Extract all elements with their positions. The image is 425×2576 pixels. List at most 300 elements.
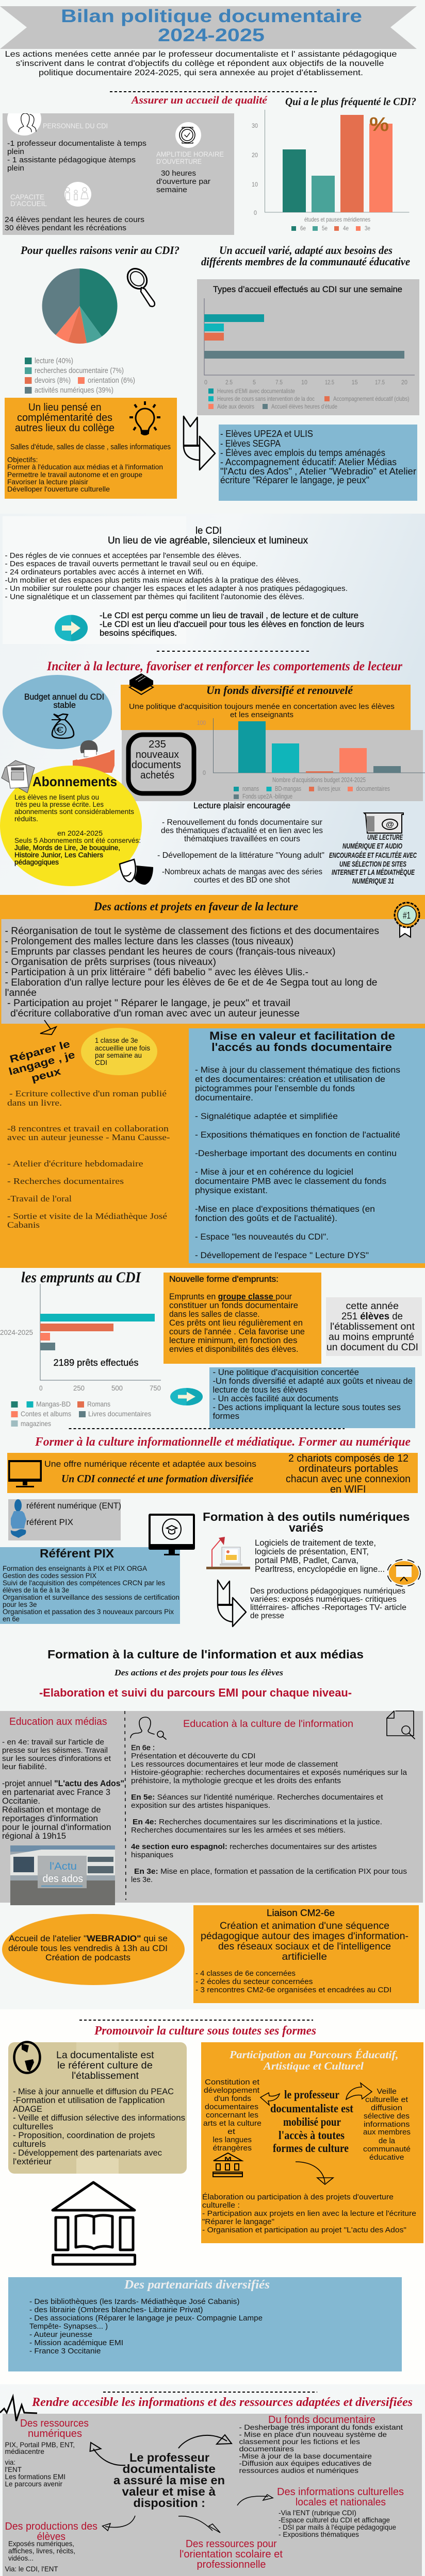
pie chart: raisons — [25, 268, 135, 395]
panel: un lieu pensé: Permettre le travail autonome et en groupe — [7, 470, 142, 479]
arrow: vers projets — [296, 2162, 333, 2184]
icon: loupe — [123, 265, 155, 307]
heading: Réparer le langage — [8, 1039, 76, 1084]
bar chart: fréquentation: 5e — [322, 225, 328, 232]
column: culture de l'information: les 3e. — [131, 1875, 153, 1884]
panel: liaison CM2-6e: Liaison CM2-6e — [267, 1908, 335, 1918]
panel: abonnements: abonnements sont considérablements — [14, 807, 134, 816]
pie chart: raisons: devoirs (8%) — [35, 376, 71, 385]
block: ressources numériques: Des ressources — [20, 2418, 89, 2429]
heading: culture de l'information: Formation à la culture de l'information et aux médias — [47, 1648, 364, 1661]
panel: PEAC: mobilisé pour — [283, 2115, 341, 2128]
panel: un lieu pensé: Favoriser la lecture plaisir — [7, 478, 88, 486]
column: éducation aux médias: Education aux médias — [9, 1716, 107, 1727]
panel: acquisitions chart: romans — [242, 785, 259, 792]
text: logiciels: Pearltress, encyclopédie en ligne... — [255, 1565, 385, 1574]
block: ressources numériques: Les formations EMI — [5, 2472, 66, 2481]
panel: abonnements — [0, 760, 142, 886]
panel: 251 élèves: un document du CDI — [326, 1342, 418, 1353]
panel: le CDI lieu de vie: besoins spécifiques. — [100, 628, 177, 638]
panel: mise en valeur du fonds: et des documentaires: création et utilisation de — [195, 1074, 385, 1084]
box: 235 documents achetés: achetés — [140, 770, 174, 781]
panel: nouvelle forme d'emprunts — [164, 1273, 321, 1364]
panel: liaison CM2-6e: pédagogique autour des images d'information- — [201, 1930, 408, 1942]
block: informations culturelles: -Espace culturel du CDI et affichage — [279, 2516, 390, 2524]
panel: abonnements: Julie, Mords de Lire, Je bouquine, — [14, 843, 120, 852]
panel: PEAC: aux membres — [363, 2128, 411, 2137]
text: lecture plaisir: des thématiques d'actualité et en lien avec les — [161, 826, 323, 835]
text: logiciels: Logiciels de traitement de texte, — [255, 1538, 376, 1548]
panel: liste d'actions: - Prolongement des malles lecture dans les classes (tous niveaux) — [5, 936, 293, 947]
panel: acquisitions chart: Nombre d'acquisitions budget 2024-2025 — [272, 776, 366, 784]
panel: référent culture: culturelles — [13, 2122, 53, 2131]
panel: abonnements: réduits. — [14, 815, 38, 823]
pie chart: raisons: lecture (40%) — [35, 357, 73, 365]
panel: acquisitions chart — [122, 718, 425, 801]
panel: personnel, horaires, capacité: CAPACITE — [10, 193, 44, 201]
panel: référents: référent PIX — [26, 1517, 73, 1527]
panel: référent culture — [8, 2042, 187, 2174]
panel: nouvelle forme d'emprunts: lecture minimum, en fonction des — [169, 1336, 297, 1345]
panel: PEAC: - Organisation et participation au projet "L'actu des Ados" — [202, 2226, 406, 2234]
panel: types d'accueil chart: Types d’accueil effectués au CDI sur une semaine — [213, 284, 402, 294]
panel: un lieu pensé: Salles d'étude, salles de classe , salles informatiques — [10, 443, 171, 451]
block: ressources numériques — [5, 2418, 89, 2488]
block: ressources numériques: l'ENT — [5, 2465, 22, 2473]
block: ressources numériques: via: — [5, 2458, 15, 2466]
panel: référent PIX — [0, 1547, 180, 1624]
column: éducation aux médias: régional à 19h15 — [2, 1832, 66, 1841]
column: éducation aux médias: en partenariat avec France 3 — [2, 1788, 110, 1797]
panel: référent culture: le référent culture de — [57, 2060, 153, 2071]
icon: écran formation — [149, 1514, 195, 1555]
panel: référent PIX: en 6e — [3, 1615, 20, 1623]
intro text: Les actions menées cette année par le professeur documentaliste et l' assistante pédagogique — [5, 50, 397, 59]
block: informations culturelles: - DSI par mails à l'équipe pédagogique — [279, 2523, 396, 2531]
panel: PEAC: informations — [364, 2120, 410, 2129]
block: ressources numériques: numériques — [28, 2428, 82, 2439]
icon: livre numérique — [364, 813, 403, 833]
panel: nouvelle forme d'emprunts: Nouvelle forme d'emprunts: — [169, 1274, 279, 1284]
icon: flèche ronde 2 — [170, 1388, 203, 1405]
column: éducation aux médias: -projet annuel "L'actu des Ados" — [2, 1779, 124, 1788]
text: professeur documentaliste: Le professeur — [129, 2451, 209, 2464]
bar chart: emprunts: magazines — [21, 1419, 51, 1428]
text: capacité: 30 élèves pendant les récréations — [5, 224, 126, 232]
block: informations culturelles — [277, 2486, 404, 2538]
panel: PEAC: Artistique et Culturel — [263, 2060, 364, 2072]
panel: acquisitions chart: BD-mangas — [275, 785, 301, 792]
text: logiciels — [255, 1538, 385, 1574]
text: lecture plaisir: - Renouvellement du fonds documentaire sur — [162, 818, 323, 827]
block: productions des élèves: affiches, livres, récits, — [8, 2547, 75, 2555]
icon: livres — [129, 673, 153, 694]
panel: liaison CM2-6e: - 3 rencontres CM2-6e organisées et encadrées au CDI — [195, 1986, 391, 1994]
panel: types d'accueil chart: 10 — [301, 379, 307, 386]
box: 235 documents achetés: documents — [132, 759, 181, 771]
panel: offre numérique: Une offre numérique récente et adaptée aux besoins — [44, 1459, 256, 1469]
text: professeur documentaliste: a assuré la mise en — [113, 2473, 225, 2487]
bar chart: fréquentation: 0 — [254, 209, 257, 216]
panel: synthèse lecture: formes — [213, 1412, 239, 1421]
panel: acquisitions chart: 0 — [203, 769, 206, 776]
panel: référent culture: - Mise à jour annuelle et diffusion du PEAC — [13, 2087, 174, 2096]
panel: mise en valeur du fonds: - Espace "les nouveautés du CDI". — [195, 1232, 329, 1242]
heading: Réparer le langage: Réparer le — [9, 1039, 71, 1065]
bar chart: emprunts: Mangas-BD — [36, 1400, 71, 1408]
panel: référent culture: -Formation et utilisation de l'application — [13, 2096, 165, 2105]
panel: 251 élèves: l'établissement ont — [330, 1321, 415, 1332]
panel: types d'accueil chart: 20 — [401, 379, 407, 386]
block: informations culturelles: -Via l'ENT (rubrique CDI) — [279, 2509, 356, 2517]
bar chart: emprunts: Livres documentaires — [88, 1410, 151, 1418]
text: logiciels: logiciels de présentation, ENT, — [255, 1547, 369, 1556]
text: productions pédagogiques: variées: exposés numériques- critiques — [250, 1595, 397, 1604]
panel: acquisitions chart: documentaires — [356, 785, 390, 792]
block: productions des élèves: Des productions des — [5, 2521, 97, 2532]
panel: abonnements: en 2024-2025 — [57, 829, 103, 837]
callout: 1 classe de 3e: par semaine au — [95, 1051, 142, 1059]
text: heures d'ouverture: d'ouverture par — [156, 177, 210, 186]
bar chart: fréquentation: % — [369, 114, 389, 135]
text: productions pédagogiques: de presse — [250, 1612, 284, 1620]
text: professeur documentaliste — [113, 2451, 225, 2510]
panel: PEAC: Constitution et — [205, 2078, 260, 2087]
intro text: s'inscrivent dans le contrat d'objectifs du collège et répondent aux objectifs de la nouvelle — [15, 59, 384, 68]
arrow: vers ressources numériques — [90, 2443, 125, 2465]
text: heures d'ouverture: 30 heures — [161, 169, 196, 178]
panel: liste d'actions: - Participation au projet " Réparer le langage, je peux" et travail — [7, 998, 290, 1009]
panel: budget: stable — [54, 700, 76, 710]
panel: offre numérique: 2 chariots composés de 12 — [288, 1453, 408, 1464]
panel: types d'accueil chart: Accompagnement éducatif (clubs) — [333, 395, 410, 402]
panel: partenariats: - Auteur jeunesse — [29, 2330, 92, 2339]
heading: outils numériques: variés — [289, 1521, 323, 1534]
panel: nouvelle forme d'emprunts: dans les salles de classe. — [169, 1310, 260, 1319]
panel: types d'accueil chart: 15 — [352, 379, 358, 386]
panel: le CDI lieu de vie: -Un mobilier et des espaces plus petits mais mieux adaptés à la pratique des élèves. — [5, 576, 301, 585]
panel: mise en valeur du fonds: - Mise à jour et en cohérence du logiciel — [195, 1167, 353, 1177]
panel: PEAC: culturelle : — [202, 2201, 240, 2210]
heading: Réparer le langage: langage , je — [8, 1049, 76, 1078]
panel: PEAC: le professeur — [284, 2088, 339, 2101]
panel: abonnements: Les élèves ne lisent plus ou — [14, 793, 99, 801]
text: personnel: plein — [7, 147, 24, 156]
panel: un lieu pensé: Former à l'éducation aux médias et à l'information — [7, 463, 163, 471]
arrow: vers fonds documentaire — [178, 2435, 232, 2448]
panel: partenariats: - des librairie (Ombres blanches- Librairie Privat) — [29, 2306, 203, 2314]
panel: offre numérique: Un CDI connecté et une formation diversifiée — [61, 1472, 253, 1485]
icon: bibliothèque — [53, 2182, 135, 2264]
panel: offre numérique: ordinateurs portables — [299, 1463, 398, 1475]
panel: liste d'actions: d'écriture collaborative d'un roman avec avec un auteur jeunesse — [10, 1008, 300, 1019]
arrow: vers productions — [102, 2516, 135, 2531]
column: culture de l'information: préhistoire, la mythologie grecque et les droits des enfants — [131, 1776, 341, 1785]
panel: le CDI lieu de vie: le CDI — [195, 526, 222, 536]
panel: un lieu pensé: autres lieux du collège — [15, 422, 115, 434]
panel: le CDI lieu de vie: - Une signalétique et un classement par thèmes qui facilitent l'autonomie des élèves. — [5, 592, 304, 601]
section background: ressources — [0, 2384, 425, 2576]
panel: mise en valeur du fonds: - Signalétique adaptée et simplifiée — [195, 1111, 338, 1121]
callout: webradio: Accueil de l'atelier "WEBRADIO" qui se — [9, 1934, 168, 1943]
panel: nouvelle forme d'emprunts: constituer un fonds documentaire — [169, 1301, 298, 1310]
bar chart: emprunts: 0 — [39, 1384, 43, 1392]
block: informations culturelles: Des informations culturelles — [277, 2486, 404, 2498]
text: professeur documentaliste: disposition : — [133, 2496, 205, 2510]
arrow: vers informations culturelles — [237, 2495, 273, 2505]
panel: le CDI lieu de vie — [3, 516, 364, 644]
panel: un lieu pensé — [5, 398, 177, 499]
panel: liaison CM2-6e: des réseaux sociaux et de l'intelligence — [218, 1941, 391, 1952]
panel: PEAC: arts et la culture — [203, 2119, 261, 2128]
text: capacité — [5, 215, 144, 232]
panel: référent PIX: élèves de la 6e à la 3e — [3, 1586, 69, 1594]
column: culture de l'information: Présentation et découverte du CDI — [131, 1752, 256, 1760]
text: personnel: plein — [7, 164, 24, 173]
block: fonds documentaire: classement pour les fictions et les — [239, 2437, 360, 2446]
panel: liaison CM2-6e — [193, 1905, 419, 2003]
panel: mise en valeur du fonds: physique existant. — [195, 1185, 268, 1195]
callout: 1 classe de 3e: 1 classe de 3e — [95, 1036, 138, 1044]
text: lecture plaisir — [157, 801, 324, 885]
block: productions des élèves: vidéos... — [8, 2554, 34, 2562]
block: fonds documentaire: - Mise en place d'un nouveau système de — [239, 2430, 387, 2438]
bar chart: fréquentation: 30 — [252, 122, 258, 129]
panel: budget — [3, 675, 112, 749]
heading: raisons: Pour quelles raisons venir au CDI? — [20, 244, 179, 257]
panel: PEAC: formes de culture — [273, 2142, 349, 2155]
block: ressources numériques: Le parcours avenir — [5, 2480, 62, 2488]
bar chart: emprunts: 2189 prêts effectués — [54, 1358, 138, 1368]
panel: le CDI lieu de vie: - 24 ordinateurs portables avec accés à internet en Wifi. — [5, 568, 204, 577]
panel: liste d'actions: l'année — [5, 988, 37, 998]
text: logiciels: portail PMB, Padlet, Canva, — [255, 1556, 358, 1565]
block: productions des élèves — [5, 2521, 97, 2573]
heading: accueil: Assurer un accueil de qualité — [130, 94, 268, 106]
block: fonds documentaire: Du fonds documentaire — [268, 2414, 375, 2426]
bar chart: emprunts: Contes et albums — [21, 1410, 71, 1418]
panel: types d'accueil chart: 2.5 — [225, 379, 233, 386]
column: éducation aux médias: pour le journal d'information — [2, 1823, 111, 1832]
panel: personnel, horaires, capacité: D'OUVERTURE — [156, 157, 202, 165]
panel: PEAC: Participation au Parcours Éducatif, — [229, 2048, 398, 2061]
panel: mise en valeur du fonds: -Desherbage important des documents en continu — [195, 1148, 397, 1158]
bar chart: fréquentation: 3e — [365, 225, 370, 232]
bar chart: fréquentation: 4e — [343, 225, 349, 232]
panel: mise en valeur du fonds: fonction des goûts et de l'actualité). — [195, 1213, 337, 1223]
bar chart: emprunts: Romans — [87, 1400, 110, 1408]
panel: mise en valeur du fonds — [189, 1028, 425, 1263]
block: ressources numériques: PIX, Portail PMB, ENT, — [5, 2441, 75, 2449]
text: personnel: -1 professeur documentaliste à temps — [7, 139, 146, 148]
heading: outils numériques: Formation à des outils numériques — [203, 1510, 410, 1523]
photo: l'Actu des ados: des ados — [42, 1873, 83, 1885]
bar chart: fréquentation: études et pauses méridiennes — [304, 216, 370, 223]
panel: publics accueillis: - Élèves avec emplois du temps aménagés — [220, 448, 385, 458]
panel: 251 élèves — [326, 1297, 422, 1356]
panel: abonnements: très peu la presse écrite. Les — [15, 800, 104, 808]
column: culture de l'information: En 3e: Mise en place, formation et passation de la certification PIX pour tous — [134, 1867, 407, 1876]
panel: 251 élèves: au moins emprunté — [329, 1331, 414, 1343]
panel: un lieu pensé: Un lieu pensé en — [28, 402, 101, 413]
panel: offre numérique: en WIFI — [330, 1484, 366, 1495]
bar chart: emprunts: 250 — [73, 1384, 85, 1392]
panel: nouvelle forme d'emprunts: envies et disponibilités des élèves. — [169, 1345, 298, 1354]
icon: bureau lampe — [206, 1537, 250, 1569]
panel: liste d'actions — [1, 919, 425, 1024]
photo: l'Actu des ados: l'Actu — [50, 1861, 77, 1872]
panel: mise en valeur du fonds: documentaire. — [195, 1093, 253, 1103]
bar chart: fréquentation: 6e — [300, 225, 306, 232]
panel: liste d'actions: - Réorganisation de tout le système de classement des fictions et des documentaires — [5, 926, 379, 937]
icon: capacité d'accueil — [64, 182, 91, 207]
panel: abonnements: pédagogiques — [14, 858, 59, 866]
arrow: vers veille — [346, 2083, 372, 2099]
panel: ressources — [3, 2414, 422, 2576]
panel: liaison CM2-6e: artificielle — [282, 1951, 327, 1962]
panel: abonnements: Seuls 5 Abonnements ont été conservés: — [14, 836, 141, 844]
panel: PEAC: les langues — [213, 2136, 252, 2144]
text: personnel — [7, 139, 146, 173]
column: culture de l'information — [130, 1711, 415, 1884]
callout: 1 classe de 3e: accueillie une fois — [95, 1044, 150, 1052]
panel: publics accueillis: "l'Actu des Ados" , Atelier "Webradio" et Atelier — [220, 466, 416, 477]
panel: référent PIX: pour les 3e — [3, 1600, 37, 1608]
block: fonds documentaire: -Mise à jour de la base documentaire — [239, 2452, 372, 2460]
panel: référent PIX: Suivi de l'acquisition des compétences CRCN par les — [3, 1579, 165, 1587]
panel: PEAC: Élaboration ou participation à des projets d'ouverture — [202, 2193, 394, 2201]
panel: le CDI lieu de vie: - Des régles de vie connues et acceptées par l'ensemble des élèves. — [5, 551, 241, 560]
column: culture de l'information: En 5e: Séances sur l'identité numérique. Recherches documentaires et — [131, 1793, 383, 1802]
panel: fonds diversifié en-tête — [121, 684, 411, 730]
icon: personne — [11, 1499, 26, 1538]
panel: référent PIX: Organisation et surveillance des sessions de certification — [3, 1593, 179, 1601]
block: productions des élèves: Exposés numériques, — [8, 2539, 74, 2548]
column: éducation aux médias: leur fiabilité. — [2, 1762, 47, 1771]
column: éducation aux médias — [2, 1716, 124, 1841]
panel: nouvelle forme d'emprunts: Ces prêts ont lieu régulièrement en — [169, 1318, 303, 1328]
icon: profil loupe — [130, 1717, 166, 1739]
panel: 251 élèves: cette année — [346, 1300, 399, 1312]
text: professeur documentaliste: documentaliste — [123, 2462, 216, 2476]
arrow: ribbon 2 — [218, 1580, 246, 1626]
block: productions des élèves: Via: le CDI, l'ENT — [5, 2565, 58, 2573]
text: productions pédagogiques: Des productions pédagogiques numériques — [250, 1587, 405, 1596]
panel: offre numérique — [7, 1453, 418, 1495]
icon: globe — [14, 2042, 40, 2073]
block: productions des élèves: élèves — [37, 2531, 66, 2543]
panel: publics accueillis: - Elèves SEGPA — [220, 438, 281, 449]
box: 235 documents achetés: nouveaux — [136, 749, 179, 760]
panel: liaison CM2-6e: - 2 écoles du secteur concernées — [195, 1977, 313, 1986]
panel: le CDI lieu de vie: Un lieu de vie agréable, silencieux et lumineux — [108, 535, 308, 546]
panel: référent PIX: Référent PIX — [40, 1547, 115, 1560]
panel: partenariats: - France 3 Occitanie — [29, 2347, 101, 2355]
text: lecture plaisir: courtes et des BD one shot — [194, 876, 290, 885]
panel: personnel, horaires, capacité: AMPLITIDE HORAIRE — [156, 150, 224, 158]
block: fonds documentaire: documentaires — [239, 2445, 294, 2453]
column: culture de l'information: Recherches documentaires sur les les armées et ses métiers. — [131, 1826, 346, 1835]
text: lecture plaisir: - Dévellopement de la littérature "Young adult" — [157, 851, 324, 860]
panel: référent culture: ADAGE — [13, 2105, 42, 2114]
box: 235 documents achetés: 235 — [149, 739, 166, 750]
panel: PEAC — [201, 2042, 423, 2243]
pie chart: raisons: activités numériques (39%) — [35, 386, 113, 395]
panel: synthèse lecture: - Un accès facilité aux documents — [213, 1394, 338, 1403]
panel: synthèse lecture: - Une politique d'acquisition concertée — [213, 1368, 359, 1377]
text: personnel: - 1 assistante pédagogique àtemps — [7, 156, 136, 164]
column: éducation aux médias: Occitanie. — [2, 1797, 40, 1806]
panel: PEAC: et — [227, 2127, 236, 2136]
panel: référent PIX: Formation des enseignants à PIX et PIX ORGA — [3, 1564, 148, 1572]
column: éducation aux médias: - en 4e: travail sur l'article de — [2, 1738, 104, 1747]
text: lecture plaisir: thématqiues travaillées en cours — [184, 835, 300, 843]
block: orientation: l'orientation scolaire et — [179, 2549, 283, 2560]
icon: journaux — [2, 760, 35, 793]
panel: types d'accueil chart: Heures d'EMI avec documentaliste — [217, 387, 295, 395]
panel: référent culture: - Proposition, coordination de projets — [13, 2131, 155, 2140]
panel: référent culture: l'établissement — [72, 2070, 139, 2081]
column: culture de l'information: En 4e: Recherches documentaires sur les discriminations et la justice. — [133, 1818, 382, 1826]
panel: types d'accueil chart: 17.5 — [375, 379, 385, 386]
text: projet d'écriture: - Sortie et visite de la Médiathèque José — [7, 1211, 167, 1221]
icon: pulsation — [0, 2397, 37, 2421]
column: culture de l'information: Les ressources documentaires et leur mode de classement — [131, 1760, 338, 1769]
column: éducation aux médias: Réalisation et montage de — [2, 1805, 101, 1815]
text: capacité: 24 élèves pendant les heures de cours — [5, 215, 144, 224]
title banner: Bilan politique documentaire — [61, 6, 362, 26]
panel: types d'accueil chart: 5 — [253, 379, 256, 386]
icon: livre numérique: @ — [386, 820, 394, 829]
intro text — [5, 50, 397, 77]
text: projet d'écriture: dans un livre. — [7, 1098, 62, 1108]
icon: tableau présentation — [387, 1560, 420, 1586]
panel: un lieu pensé: Dévelloper l'ouverture culturelle — [7, 485, 110, 493]
icon: document loupe — [387, 1711, 415, 1739]
panel: nouvelle forme d'emprunts: Emprunts en groupe classe pour — [169, 1292, 292, 1301]
panel: PEAC: documentaires — [205, 2103, 258, 2111]
panel: abonnements: Histoire Junior, Les Cahiers — [14, 851, 103, 859]
band: actions et projets lecture: Des actions et projets en faveur de la lecture — [93, 900, 298, 913]
panel: synthèse lecture: - Des actions impliquant la lecture sous toutes ses — [213, 1403, 401, 1412]
panel: acquisitions chart: 100 — [197, 719, 206, 726]
text: productions pédagogiques: littérraires- affiches -Reportages TV- article — [250, 1603, 406, 1612]
panel: le CDI lieu de vie: -Le CDI est perçu comme un lieu de travail , de lecture et de culture — [100, 611, 358, 620]
text: projet d'écriture: Cabanis — [7, 1220, 40, 1230]
panel: types d'accueil chart — [197, 279, 419, 415]
text: projet d'écriture: - Atelier d'écriture hebdomadaire — [7, 1159, 143, 1168]
intro text: politique documentaire 2024-2025, qui sera annexée au projet d'établissement. — [39, 69, 363, 77]
icon: médaille — [395, 903, 419, 937]
heading: outils numériques — [203, 1510, 410, 1534]
panel: personnel, horaires, capacité — [3, 103, 234, 235]
text: lecture plaisir: -Nombreux achats de mangas avec des séries — [162, 868, 322, 876]
panel: types d'accueil chart: 12.5 — [325, 379, 334, 386]
panel: 251 élèves: 251 élèves de — [341, 1311, 403, 1322]
section background: lecture — [0, 514, 425, 895]
icon: ampoule — [129, 401, 160, 435]
callout: webradio: Création de podcasts — [45, 1953, 130, 1962]
column: culture de l'information: Education à la culture de l'information — [183, 1719, 353, 1730]
heading: les emprunts: les emprunts au CDI — [21, 1269, 141, 1286]
text: projet d'écriture: - Recherches documentaires — [7, 1176, 124, 1186]
text: lecture plaisir: Lecture plaisir encouragée — [193, 801, 290, 810]
panel: PEAC: - Participation aux projets en lien avec la lecture et l'écriture — [202, 2209, 416, 2218]
block: orientation: professionnelle — [197, 2559, 266, 2570]
text: professeur documentaliste: valeur et mise à — [122, 2485, 216, 2498]
text: projet d'écriture — [7, 1089, 170, 1230]
panel: PEAC: sélective des — [364, 2112, 410, 2121]
